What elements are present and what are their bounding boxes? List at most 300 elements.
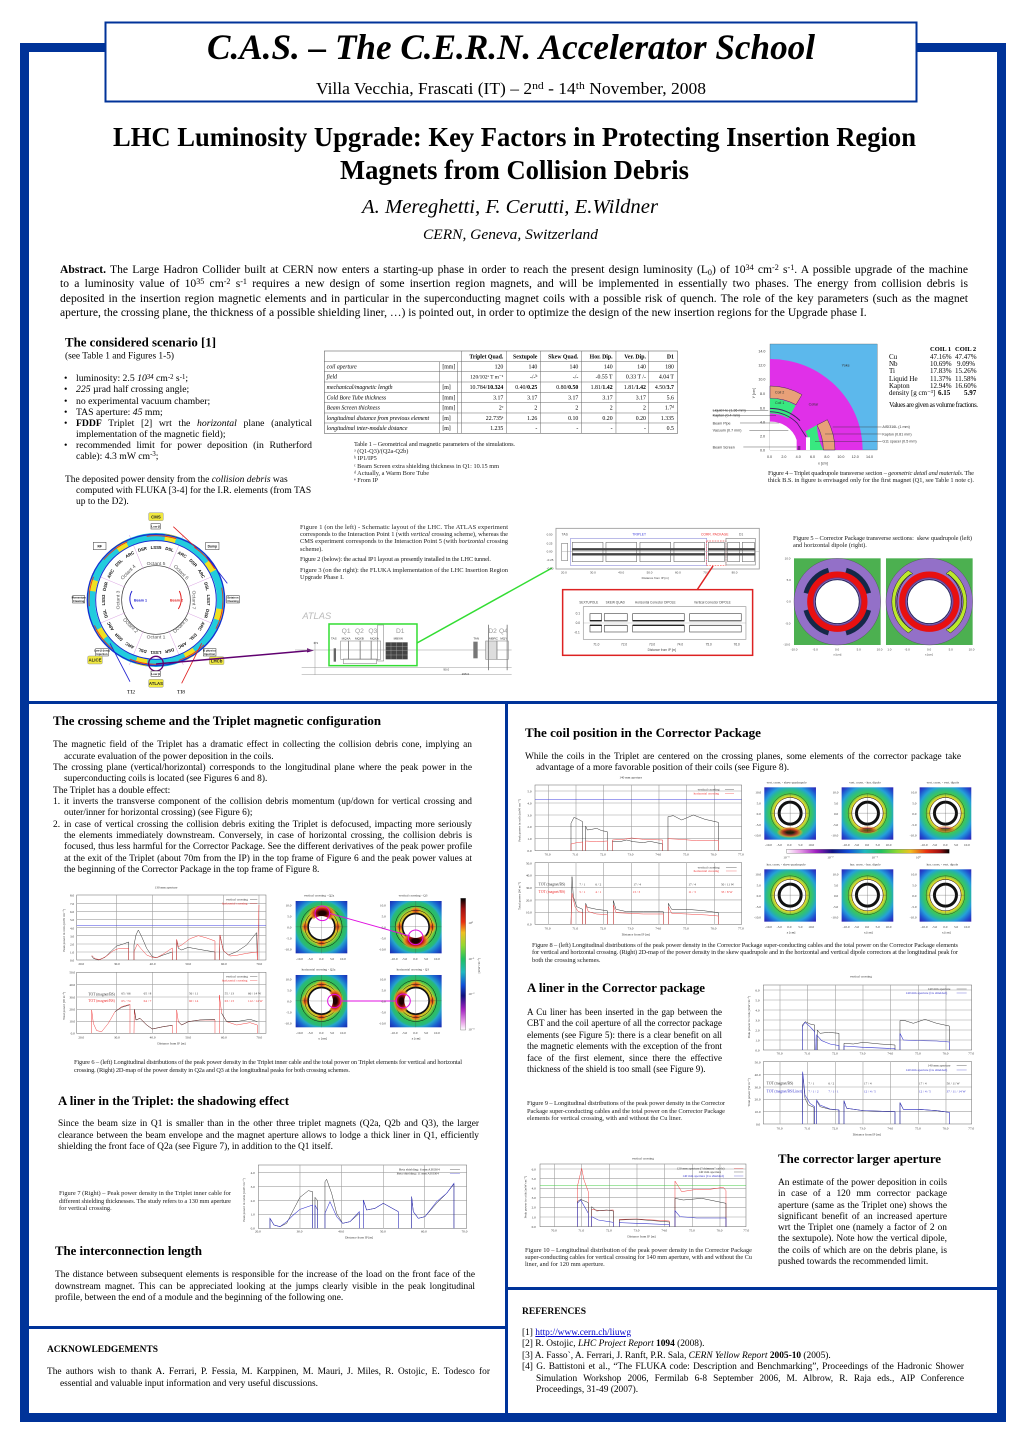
figure 6 colour scale: 10⁻³	[468, 1028, 474, 1032]
figure 6 total power plot: 64 / 7	[144, 999, 152, 1003]
figure 9 peak power plot: 2.0	[755, 1028, 760, 1032]
figure 1: LHC ring layout: Octant 4	[120, 564, 138, 581]
table 1: longitudinal distance from previous element	[327, 415, 430, 422]
figure 8 map axis labels: 10.0	[833, 790, 839, 794]
scenario bullet list: •	[64, 440, 67, 451]
interconnection text	[55, 1270, 475, 1308]
panel: corrector larger aperture	[778, 1152, 947, 1270]
map axis labels: -5.0	[308, 957, 313, 961]
figure 9 total power plot: 50 / 11 W	[947, 1082, 961, 1086]
figure 1: LHC ring layout: DSR	[188, 558, 199, 568]
figure 8 peak power plot: 4.0	[527, 801, 532, 805]
figure 4: triplet quadrupole section: 2.0	[781, 455, 786, 459]
figure 8 map axis labels: -5.0	[932, 925, 938, 929]
coil material composition table: COIL 2	[955, 346, 976, 353]
figure 6 peak power density plot: vertical crossing	[226, 898, 248, 902]
figure 4: triplet quadrupole section: 14.0	[758, 349, 765, 353]
scenario bullet list: •	[64, 373, 67, 384]
figure 9 peak power plot: 71.0	[804, 1052, 810, 1056]
figure 9 total power plot	[747, 1061, 974, 1137]
figure 4 caption: Figure 4 – Triplet quadrupole transverse section – geometric detail and materials. The	[768, 470, 974, 477]
figure 8 map: horizontal skew quadrupole: hor. cross. - skew quadrupole	[767, 862, 806, 866]
figure 8 map axis labels: -5.0	[756, 905, 761, 909]
map axis labels: 5.0	[382, 989, 386, 993]
arrow: IP1 to ATLAS layout	[156, 648, 314, 664]
figure 10: peak power comparison plot: 74.0	[661, 1228, 667, 1232]
liner in triplet text: shielding the front face of Q2a (see Figure 7), in addition to the Q1 itself.	[58, 1142, 333, 1152]
figure 8 map axis labels: -10.0	[921, 925, 928, 929]
figure 8 map axis labels: -5.0	[932, 843, 938, 847]
figure 1: LHC ring layout: ARC	[124, 550, 135, 559]
figure 4: triplet quadrupole section: 12.0	[852, 455, 859, 459]
figure 4: triplet quadrupole section: 4.0	[760, 420, 765, 424]
figure 7: shielding thickness plot: 40.0	[338, 1230, 344, 1234]
figure 8 map: horizontal vertical dipole	[920, 862, 971, 922]
figure 7: shielding thickness plot: 20.0	[255, 1230, 261, 1234]
references list: [2] R. Ostojic, LHC Project Report 1094 (2008).	[522, 1339, 704, 1349]
figure 5: corrector transverse sections: 5.0	[857, 647, 861, 651]
figure 8 map axis labels: -5.0	[833, 905, 839, 909]
figure 10: peak power comparison plot: 72.0	[606, 1228, 612, 1232]
figure 9 total power plot: 76.0	[943, 1127, 949, 1131]
figure 8 map axis labels: 5.0	[757, 801, 761, 805]
panel: crossing scheme and triplet	[53, 714, 472, 878]
venue and date: nd	[532, 80, 544, 92]
figure 10: peak power comparison plot: Distance from IP [m]	[627, 1234, 656, 1238]
figure 8 map axis labels: 5.0	[912, 801, 917, 805]
figure 1: LHC ring layout: Low β	[151, 525, 160, 529]
table 1: coil aperture	[327, 364, 357, 370]
figure 7: shielding thickness plot: 60.0	[421, 1230, 427, 1234]
map axis labels: x [cm]	[412, 1036, 420, 1040]
crossing scheme text: 2.	[53, 820, 60, 830]
corrector package zoom box: 74.0	[677, 643, 683, 647]
figure 9: corrector liner plots: vertical crossing	[850, 975, 872, 979]
figure 8 colour scale: 10⁻³	[783, 856, 789, 860]
table 1: 0.10	[568, 416, 578, 422]
figure 9 total power plot: 77.0	[968, 1127, 974, 1131]
figure 6 total power plot: 20.0	[78, 1035, 84, 1039]
figure 1: LHC ring layout: DSL	[102, 608, 109, 618]
figure 5: corrector transverse sections: x [cm]	[833, 653, 841, 657]
liner in triplet heading: A liner in the Triplet: the shadowing effect	[58, 1094, 290, 1108]
deposited power note	[65, 475, 311, 511]
figure 6 peak power density plot: Peak power in coils [mW cm⁻³]	[62, 909, 66, 952]
figure 3: FLUKA implementation plot: 50.0	[647, 571, 653, 575]
figure 8 map: vertical skew quadrupole	[764, 780, 816, 840]
figure 9 total power plot: 17 / 4	[864, 1082, 872, 1086]
figure 6 peak power density plot: 20.0	[78, 962, 84, 966]
table 1: 140	[529, 364, 537, 370]
figure 6 total power plot: 40.0	[69, 983, 75, 987]
deposited power note: up to the D2).	[76, 497, 129, 507]
figure 7 caption	[59, 1190, 232, 1212]
map axis labels: 0.0	[382, 1000, 386, 1004]
figure 5: corrector transverse sections: 5.0	[787, 578, 791, 582]
table 1: 0.20	[602, 416, 613, 422]
figure 7: shielding thickness plot: Peak power in cable [mW cm⁻³]	[242, 1178, 246, 1222]
coil material composition table: Values are given as volume fractions.	[889, 401, 978, 409]
crossing scheme text: outer/inner for horizontal crossing) (see Figure 6);	[64, 808, 252, 818]
corrector package zoom box: -0.1	[574, 630, 580, 634]
figure 8 total power plot: 0.0	[527, 923, 532, 927]
figure 6 peak power density plot: 0.0	[70, 959, 74, 963]
figure 8 map axis labels: 10.0	[833, 872, 839, 876]
map axis labels: 10.0	[340, 1031, 346, 1035]
scenario heading: The considered scenario [1]	[65, 336, 216, 350]
figure 3: FLUKA implementation plot: 0.50	[547, 533, 553, 537]
figure 5: corrector transverse sections: 10.0	[969, 647, 975, 651]
map axis labels: -5.0	[286, 1010, 292, 1014]
figure 1: LHC ring layout: DSR	[203, 609, 210, 619]
figure 1: LHC ring layout: Cleaning	[227, 599, 239, 603]
figure 8 peak power plot: 72.0	[600, 852, 606, 856]
figure 8 map axis labels: 0.0	[834, 812, 838, 816]
figure 8 map axis labels: -5.0	[854, 843, 860, 847]
coil material composition table: 47.47%	[955, 353, 977, 361]
acknowledgements heading: ACKNOWLEDGEMENTS	[47, 1345, 158, 1355]
figure 6 peak power density plot: 3.0	[70, 934, 74, 938]
table 1: 5.6	[667, 395, 674, 401]
figure 8 map axis labels: 5.0	[954, 843, 958, 847]
map axis labels: 5.0	[330, 957, 334, 961]
figure 1: LHC ring layout: Momentum	[72, 596, 86, 600]
figure 5: corrector transverse sections: 5.0	[949, 647, 953, 651]
figure 1: LHC ring layout: LHCb	[211, 658, 223, 663]
map axis labels: -10.0	[285, 1021, 292, 1025]
figure 8 map axis labels: -5.0	[854, 925, 860, 929]
figure 9 total power plot: Distance from IP [m]	[853, 1133, 881, 1137]
figure 6 total power plot: 60.0	[221, 1035, 227, 1039]
figure 9 total power plot: 72.0	[832, 1127, 838, 1131]
arrow: red zoom connector	[697, 566, 713, 590]
arrow: green zoom connector	[417, 568, 552, 643]
scenario bullet list: luminosity: 2.5 1034 cm-2 s-1;	[76, 373, 188, 384]
figure 8 peak power plot: vertical crossing	[698, 788, 720, 792]
table 1: 1.81/1.42	[624, 385, 646, 391]
figure 8 map axis labels: x [cm]	[942, 930, 951, 934]
figure 8 map: vertical vertical dipole	[920, 780, 971, 840]
corrector liner text	[527, 1007, 722, 1079]
figure 8 map axis labels: 10.0	[911, 872, 917, 876]
figure 9 total power plot: 6 / 2	[828, 1082, 835, 1086]
figure 5: corrector transverse sections: -10.0	[783, 643, 790, 647]
map axis labels: -5.0	[381, 1010, 386, 1014]
figure 9 total power plot: 12 / 4 / 5	[864, 1089, 876, 1093]
figure 2: ATLAS IP1 layout: TAN	[473, 637, 479, 641]
crossing scheme text: The Triplet has a double effect:	[53, 786, 170, 796]
figures 1-3 caption: CMS experiment corresponds to the Interaction Point 5 (with horizontal crossing	[300, 538, 509, 545]
figure 2: ATLAS IP1 layout: MQXB	[355, 637, 364, 641]
corrector package zoom box: Horizontal Corrector DIPOLE	[635, 600, 676, 604]
figure 4: triplet quadrupole section: AISI316L (1 mm)	[882, 425, 910, 429]
figure 1: LHC ring layout: ARC	[197, 568, 206, 579]
figure 9 total power plot: Total power [W m⁻¹]	[747, 1078, 751, 1107]
figure 2: ATLAS IP1 layout	[295, 611, 512, 676]
figure 9 total power plot: 17 / 4	[919, 1082, 927, 1086]
figure 7: shielding thickness plot: 70.0	[462, 1230, 468, 1234]
table 1: 1.335	[661, 416, 674, 422]
figure 9 peak power plot: 0.0	[755, 1048, 760, 1052]
panel: references	[522, 1307, 964, 1400]
table 1: 22.735ᵉ	[486, 416, 504, 422]
figure 7 caption: Figure 7 (Right) – Peak power density in the Triplet inner cable for	[59, 1190, 232, 1197]
crossing scheme text: in case of vertical crossing the collision debris exiting the Triplet is defocused, impacting more seriously	[64, 820, 472, 830]
crossing scheme text: superconducting coils is located (see Figures 6 and 8).	[64, 774, 267, 784]
figure 9 caption: elements for vertical crossing, with and without the Cu liner.	[527, 1115, 682, 1122]
crossing scheme text: The crossing plane (vertical/horizontal) corresponds to the longitudinal plane where the peak power in the	[53, 763, 472, 773]
figure 6 caption: Figure 6 – (left) Longitudinal distributions of the peak power density in the Triplet inner cable and the total power on Triplet elements for vertical and horizontal	[74, 1059, 462, 1066]
abstract	[60, 263, 968, 323]
table 1: [mm]	[442, 406, 455, 412]
coil position text: advantage of a more favorable position of their coils (see Figure 8).	[536, 763, 789, 773]
larger aperture text: pushed towards the recommended limit.	[778, 1257, 928, 1267]
table 1: 140	[570, 364, 578, 370]
figure 4: triplet quadrupole section	[713, 344, 917, 465]
table 1: [mm]	[442, 364, 455, 370]
map axis labels: 10.0	[380, 904, 386, 908]
table 1: 0.33 T /-	[626, 375, 646, 381]
figure 6 total power plot: TOT (magnet/BS)	[88, 999, 116, 1003]
panel: interconnection length	[55, 1244, 475, 1308]
map axis labels: 10.0	[340, 957, 346, 961]
figure 1: LHC ring layout: Beam 1	[134, 599, 147, 603]
coil position heading: The coil position in the Corrector Package	[525, 726, 762, 740]
coil material composition table: 9.09%	[957, 360, 975, 368]
figure 8 colour scale	[783, 849, 949, 860]
coil material composition table	[889, 346, 978, 409]
figure 7: shielding thickness plot: Distance from IP [m]	[345, 1236, 373, 1240]
figure 9 total power plot: 0.0	[756, 1122, 760, 1126]
map axis labels: x [cm]	[318, 1036, 327, 1040]
figure 9 peak power plot: 77.0	[968, 1052, 974, 1056]
table 1: 1.235	[490, 426, 503, 432]
figure 5: corrector transverse sections: 0.0	[927, 647, 931, 651]
figure 6 map: horizontal crossing Q2a: horizontal crossing - Q2a	[302, 967, 336, 971]
scenario bullet list: cable): 4.3 mW cm-3;	[76, 451, 158, 462]
interconnection text: The distance between subsequent elements is responsible for the increase of the load on the front face of the	[55, 1270, 475, 1280]
figure 8 total power plot: 71.0	[572, 927, 578, 931]
figure 4: triplet quadrupole section: 10.0	[837, 455, 844, 459]
figure 4: triplet quadrupole section: 0.0	[767, 455, 772, 459]
figure 4: triplet quadrupole section: 8.0	[760, 392, 765, 396]
scenario bullet list	[64, 373, 312, 465]
figure 1: LHC ring layout: RF	[97, 544, 102, 548]
map axis labels: 10.0	[286, 904, 292, 908]
map axis labels: -5.0	[286, 936, 292, 940]
figure 7: shielding thickness plot: 1.0	[251, 1213, 255, 1217]
corrector liner text: A Cu liner has been inserted in the gap between the	[527, 1007, 722, 1017]
figure 2: ATLAS IP1 layout: ATLAS	[301, 611, 332, 621]
figure 8 peak power plot: 75.0	[683, 852, 689, 856]
figure 8 map: vertical horizontal dipole	[842, 780, 893, 840]
figure 1: LHC ring layout: LSS7	[206, 595, 211, 606]
coil material composition table: 12.94%	[930, 382, 952, 390]
figure 6 total power plot: TOT (magnet/BS)	[88, 992, 116, 996]
figure 1: LHC ring layout: DSL	[165, 546, 175, 553]
crossing scheme text: the elements immediately downstream. Conversely, in case of horizontal crossing, the collision debris is	[64, 831, 472, 841]
coil material composition table: Cu	[889, 353, 898, 361]
figure 2: ATLAS IP1 layout: Q2	[355, 628, 364, 635]
figure 8 map axis labels: 0.0	[757, 812, 761, 816]
larger aperture text: wrt the Triplet one (namely a factor of 2 on	[778, 1223, 947, 1233]
figure 8 map axis labels: -5.0	[911, 823, 917, 827]
figure 10: peak power comparison plot	[524, 1156, 749, 1238]
figure 8 map axis labels: -5.0	[911, 905, 917, 909]
figure 8 peak power plot: horizontal crossing	[694, 792, 719, 796]
coil material composition table: 5.97	[964, 389, 977, 397]
liner in triplet text: Since the beam size in Q1 is smaller than in the other three triplet magnets (Q2a, Q2b and Q3), the larger	[58, 1119, 479, 1129]
figure 8 peak power plot: 74.0	[655, 852, 661, 856]
figure 8 total power plot: horizontal crossing	[694, 869, 719, 873]
figure 9 total power plot: 50.0	[755, 1061, 761, 1065]
figure 1: LHC ring layout: Octant 6	[172, 564, 190, 582]
figure 2: ATLAS IP1 layout: 195.0	[462, 672, 469, 676]
figure 6 total power plot: vertical crossing	[226, 974, 248, 978]
figure 10: peak power comparison plot: 140 mm aperture	[698, 1170, 722, 1174]
figure 2: ATLAS IP1 layout: MQXA	[370, 637, 379, 641]
figure 6 total power plot: horizontal crossing	[222, 978, 248, 982]
figure 6 total power plot	[62, 971, 266, 1046]
figure 10: peak power comparison plot: Peak power in coils [mW cm⁻³]	[524, 1176, 528, 1218]
figure 8 map axis labels: -10.0	[831, 916, 839, 920]
figure 6 total power plot: 56 / 11	[189, 992, 198, 996]
figure 8 map axis labels: 10.0	[964, 925, 970, 929]
figure 1: LHC ring layout: TI2	[127, 690, 135, 696]
figure 8 map axis labels: 5.0	[798, 843, 803, 847]
figure 7: shielding thickness plot: 3.0	[251, 1185, 255, 1189]
table 1: Beam Screen thickness	[327, 406, 381, 412]
figure 2: ATLAS IP1 layout: TAS	[331, 637, 337, 641]
figure 6 total power plot: 112 / 14 W	[248, 999, 264, 1003]
larger aperture text: the sextupole). Note how the vertical dipole,	[778, 1234, 947, 1244]
corrector package zoom box: 0.0	[576, 621, 580, 625]
figure 6 peak power density plot: 4.0	[70, 926, 74, 930]
figure 9 total power plot: 37 / 11 / 14 W	[947, 1089, 966, 1093]
table 1: 4.50/3.7	[655, 385, 674, 391]
figure 8 total power plot: 6 / 2	[595, 882, 602, 886]
table 1 caption: Table 1 – Geometrical and magnetic parameters of the simulations.	[354, 441, 515, 448]
table 1: 10.784/10.324	[470, 385, 503, 391]
figure 1: LHC ring layout: Dump	[208, 544, 217, 548]
figure 7: shielding thickness plot	[242, 1165, 468, 1240]
figure 1: LHC ring layout: LSS5	[151, 545, 162, 550]
figure 4: triplet quadrupole section: Collar	[809, 402, 819, 406]
corrector liner text: face of the first element, since there the effective	[527, 1053, 722, 1063]
figure 8 map: vertical horizontal dipole: vert. cross. - hor. dipole	[849, 780, 881, 784]
figure 2: ATLAS IP1 layout: D1	[396, 628, 405, 635]
figure 1: LHC ring layout	[72, 513, 239, 696]
map axis labels: 5.0	[382, 915, 386, 919]
coil material composition table: 11.37%	[930, 375, 951, 383]
table 1: -	[576, 426, 578, 432]
figure 9 peak power plot: 74.0	[887, 1052, 893, 1056]
crossing scheme text: focused, thus less harmful for the Corrector Package. See the different derivatives of the peak power profile	[64, 842, 472, 852]
figure 8 total power plot	[518, 861, 744, 937]
figure 5: corrector transverse sections: 10.0	[785, 557, 791, 561]
figure 2: ATLAS IP1 layout: Q3	[368, 628, 378, 635]
figure 6 total power plot: 10.0	[69, 1020, 75, 1024]
figure 6 map: vertical crossing Q3	[390, 894, 442, 953]
figure 8 total power plot: 30.0	[526, 886, 532, 890]
figure 8 map axis labels: -5.0	[756, 823, 761, 827]
figure 8 map axis labels: 5.0	[876, 843, 880, 847]
figure 8 map: horizontal vertical dipole: hor. cross. - vert. dipole	[927, 862, 959, 866]
figure 3: FLUKA implementation plot: 20.0	[561, 571, 567, 575]
figure 9 total power plot: 20.0	[755, 1098, 761, 1102]
figure 6 caption: crossing. (Right) 2D-map of the power density in Q2a and Q3 at the longitudinal peaks for both crossing schemes.	[74, 1067, 350, 1074]
figure 9 peak power plot: 76.0	[943, 1052, 949, 1056]
figure 9 peak power plot: 1.0	[755, 1038, 760, 1042]
figure 9 peak power plot: Peak power in coils [mW cm⁻³]	[747, 996, 751, 1038]
figure 2: ATLAS IP1 layout: 90.0	[443, 667, 449, 671]
table 1: 120/102ᵃ T m⁻¹	[470, 375, 504, 381]
figure 6 map: vertical crossing Q2a: vertical crossing - Q2a	[304, 894, 335, 898]
abstract: aperture, the crossing plane, the thickness of a possible shielding liner, …) is pointed out, in order to optimize the design of the new insertion regions for the Upgrade phase I.	[60, 306, 867, 319]
figure 4 caption	[768, 470, 974, 484]
figure 8 map axis labels: 10.0	[755, 790, 761, 794]
abstract: Abstract. The Large Hadron Collider built at CERN now enters a starting-up phase in order to reach the present design luminosity (L0) of 1034 cm-2 s-1. A possible upgrade of the machine	[60, 263, 968, 277]
school title box	[106, 22, 916, 102]
crossing scheme text	[53, 740, 472, 878]
figure 8 map axis labels: -5.0	[777, 843, 782, 847]
figure 8 map axis labels: 5.0	[798, 925, 803, 929]
map axis labels: -5.0	[402, 1031, 408, 1035]
figure 8 map axis labels: 0.0	[757, 894, 761, 898]
larger aperture text: An estimate of the power deposition in coils	[778, 1178, 947, 1188]
coil material composition table: 11.58%	[955, 375, 976, 383]
figure 7: shielding thickness plot: 30.0	[297, 1230, 303, 1234]
map axis labels: -10.0	[285, 947, 292, 951]
table 1: 3.17	[636, 395, 646, 401]
figure 4: triplet quadrupole section: Yoke	[842, 363, 850, 367]
figure 10: peak power comparison plot: 2.0	[532, 1206, 536, 1210]
larger aperture text: the coils of which are on the debris plane, is	[778, 1246, 947, 1256]
figure 1: LHC ring layout: ARC	[106, 621, 115, 632]
table 1: [m]	[442, 426, 451, 432]
panel: liner in the corrector package	[527, 981, 722, 1079]
map axis labels: 0.0	[287, 926, 292, 930]
figure 9 total power plot: 30.0	[755, 1085, 761, 1089]
corrector liner text: CBT and the coil aperture of all the corrector package	[527, 1018, 722, 1028]
crossing scheme text: the beginning of the Corrector Package in the top frame of Figure 8.	[64, 865, 319, 875]
figure 5: corrector transverse sections: -5.0	[785, 621, 791, 625]
poster title: LHC Luminosity Upgrade: Key Factors in Protecting Insertion Region	[113, 122, 916, 152]
figure 10: peak power comparison plot: 70.0	[551, 1228, 557, 1232]
figure 1: LHC ring layout: TI8	[177, 690, 185, 696]
coil position text: While the coils in the Triplet are centered on the crossing planes, some elements of the corrector package take	[525, 752, 961, 762]
figure 2: ATLAS IP1 layout: IP1	[314, 641, 318, 645]
authors: A. Mereghetti, F. Cerutti, E.Wildner	[360, 196, 658, 218]
figure 10: peak power comparison plot: 6.0	[532, 1167, 536, 1171]
figure 9 peak power plot: 5.0	[755, 998, 760, 1002]
figure 8 map axis labels: 0.0	[787, 843, 792, 847]
figure 10: peak power comparison plot: 77.0	[743, 1228, 749, 1232]
coil material composition table: Ti	[889, 367, 895, 375]
figure 4: triplet quadrupole section: Kapton (0.4 mm)	[713, 414, 740, 418]
table 1: 3.17	[493, 395, 503, 401]
figure 4: triplet quadrupole section: 6.0	[760, 406, 765, 410]
map axis labels: -10.0	[296, 957, 303, 961]
figure 10: peak power comparison plot: 140 mm aperture (Cu shielded)	[682, 1174, 724, 1178]
figure 7: shielding thickness plot: 0.0	[251, 1226, 255, 1230]
figure 9 total power plot: 140 mm aperture (Cu shielded)	[906, 1068, 947, 1072]
figure 9 total power plot: 74.0	[887, 1127, 893, 1131]
table 1: [m]	[442, 416, 451, 422]
figure 8 map axis labels: 0.0	[865, 843, 869, 847]
scenario bullet list: •	[64, 396, 67, 407]
figure 8 total power plot: 17 / 4	[688, 882, 696, 886]
